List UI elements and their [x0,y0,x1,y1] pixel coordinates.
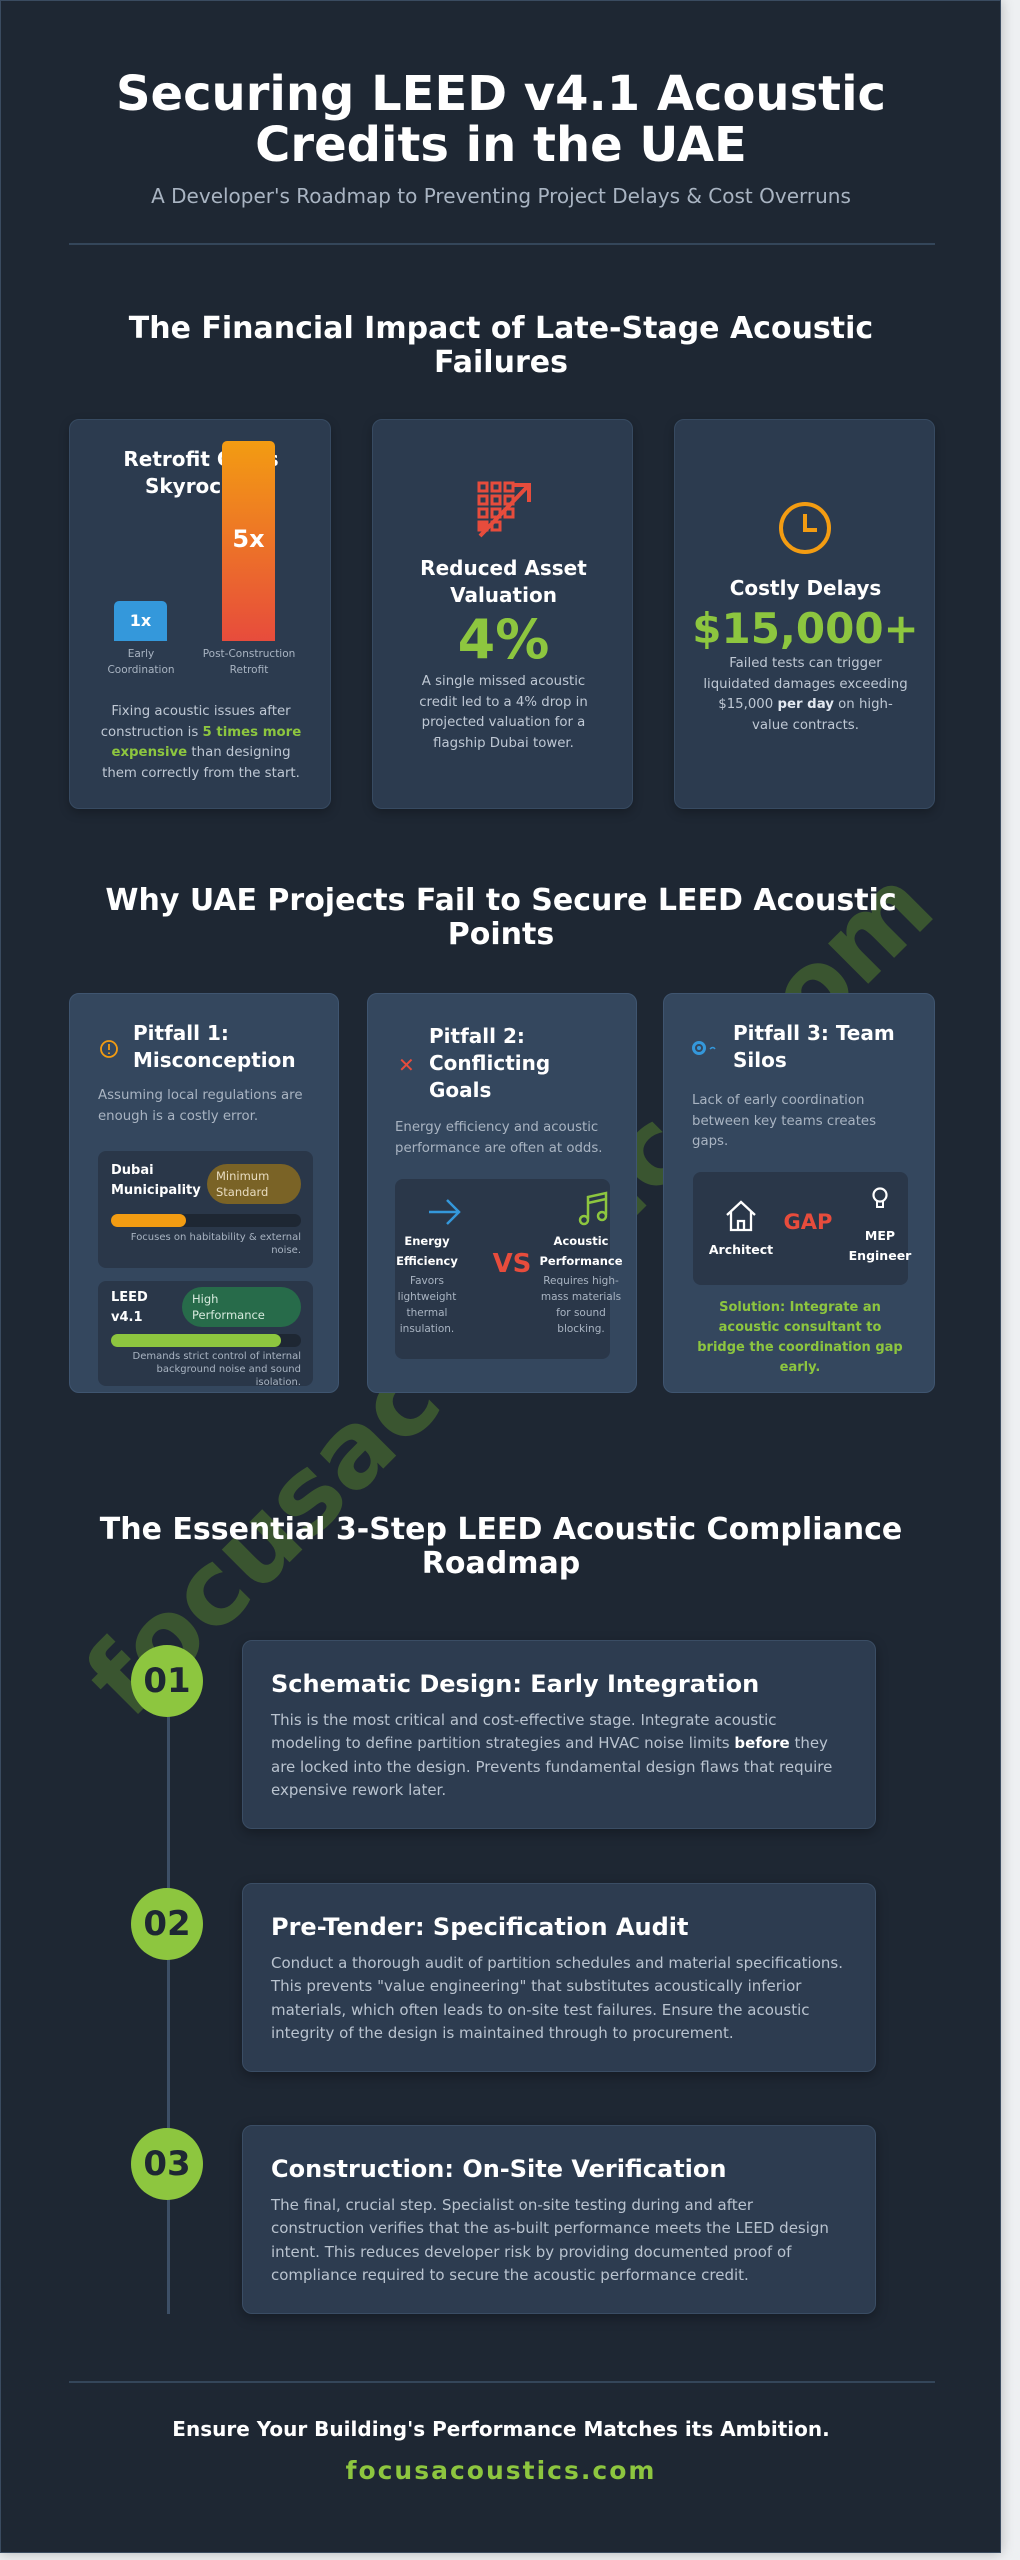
versus box: VS [493,1249,531,1279]
step number 03: 03 [143,2144,191,2184]
step 03 [131,2125,876,2318]
panel: costly delays [674,419,935,809]
heading: why projects fail: Why UAE Projects Fail to Secure LEED Acoustic [105,883,897,918]
panel: pitfall 1 [69,993,339,1393]
heading: why projects fail: Points [448,917,554,952]
pitfall title: Conflicting [429,1051,550,1075]
step number 03 [131,2128,203,2200]
bar: 5x [222,441,275,641]
heading: roadmap: The Essential 3-Step LEED Acoustic Compliance [100,1512,902,1547]
bar chart: Post-Construction [203,648,295,660]
comparison: leed v4.1: High [192,1292,218,1306]
comparison: leed v4.1: LEED [111,1290,148,1305]
footer tagline: Ensure Your Building's Performance Matches its Ambition. [172,2417,830,2441]
text: Failed tests can trigger liquidated damages exceeding $15,000 per day on high-value contracts. [703,656,908,732]
pitfall title: Goals [429,1078,491,1102]
icon: bulb [872,1187,888,1208]
panel: pitfall 3 [663,993,935,1393]
text: Lack of early coordination between key teams creates gaps. [692,1093,876,1149]
comparison: leed v4.1: v4.1 [111,1310,143,1325]
heading: roadmap [100,1512,902,1581]
icon: music note [578,1192,608,1226]
step card 1 [242,1640,876,1829]
versus box [395,1179,610,1359]
comparison: dubai municipality: Minimum Standard [216,1169,269,1199]
icon: warning [100,1040,118,1058]
gap diagram: GAP [784,1210,832,1234]
versus box: Energy Efficiency [396,1234,458,1268]
gap diagram: Engineer [849,1248,911,1263]
bar labels: Early [128,648,154,660]
gap diagram [693,1172,908,1285]
text: Energy efficiency and acoustic performance are often at odds. [395,1120,603,1156]
bar labels: Coordination [107,664,175,676]
panel: retrofit costs [69,419,331,809]
icon: clock [779,502,831,554]
comparison: dubai municipality [98,1151,313,1268]
step card 2: Conduct a thorough audit of partition schedules and material specifications. This prevents "value engineering" that substitutes acoustically inferior materials, which often leads to on-site test failures. Ensure the acoustic integrity of the design is maintained through to procurement. [271,1954,843,2042]
text: A single missed acoustic credit led to a 4% drop in projected valuation for a flagship Dubai tower. [419,674,588,750]
heading: roadmap: Roadmap [422,1546,580,1581]
comparison: leed v4.1: Demands strict control of internal background noise and sound isolation. [133,1351,301,1388]
heading: financial impact [128,311,873,380]
step card 2 [242,1883,876,2072]
versus box: Favors lightweight thermal insulation. [398,1275,456,1335]
bar: 1x [114,601,167,641]
step 01 [131,1640,876,1832]
card title [123,447,279,498]
icon: house [726,1200,756,1232]
versus box: Requires high-mass materials for sound blocking. [541,1275,621,1335]
heading: financial impact: The Financial Impact of Late-Stage Acoustic [129,311,873,346]
text: Fixing acoustic issues after construction is 5 times more expensive than designing them correctly from the start. [101,704,301,780]
watermark: focusacoustics.com [62,845,956,1739]
pitfall title: Pitfall 1: [133,1021,229,1045]
icon: team [692,1041,716,1055]
footer url: focusacoustics.com [346,2456,656,2485]
heading: why projects fail [105,883,897,952]
step card 3: The final, crucial step. Specialist on-site testing during and after construction verifies that the as-built performance meets the LEED design intent. This reduces developer risk by providing documented proof of compliance required to secure the acoustic performance credit. [271,2196,829,2284]
icon: arrow [429,1199,461,1225]
step number 01: 01 [143,1661,191,1701]
step card 3: Construction: On-Site Verification [271,2155,726,2183]
bar: 1x: 1x [130,611,151,630]
icon: valuation grid [478,482,531,538]
panel: pitfall 2 [367,993,637,1393]
title: Securing LEED v4.1 Acoustic [116,66,886,122]
step 02 [131,1883,876,2076]
stat: 4%: 4% [458,608,549,671]
card title: Reduced Asset [420,556,587,580]
bar chart [107,441,295,676]
subtitle: A Developer's Roadmap to Preventing Project Delays & Cost Overruns [151,184,851,208]
bar chart: Retrofit [230,664,268,676]
pitfall title: Pitfall 2: [429,1024,525,1048]
step card 1: This is the most critical and cost-effective stage. Integrate acoustic modeling to define partition strategies and HVAC noise limits before they are locked into the design. Prevents fundamental design flaws that require expensive rework later. [271,1711,832,1799]
timeline line [167,1691,170,2314]
text: Assuming local regulations are enough is a costly error. [98,1088,303,1124]
panel: asset valuation [372,419,633,809]
pitfall title: Misconception [133,1048,296,1072]
card title: Costly Delays [730,576,881,600]
comparison: dubai municipality: Dubai [111,1163,154,1178]
icon: x: ✕ [398,1053,415,1077]
title [116,66,886,173]
step card 1: Schematic Design: Early Integration [271,1670,759,1698]
bar: 5x: 5x [232,525,265,553]
gap diagram: Architect [709,1242,773,1257]
pitfall title [429,1024,550,1102]
step card 3 [242,2125,876,2314]
pitfall title: Pitfall 3: Team [733,1021,895,1045]
comparison: dubai municipality: Municipality [111,1183,201,1198]
versus box: Acoustic Performance [539,1234,623,1268]
stat: $15,000+: $15,000+ [692,604,919,653]
step card 2: Pre-Tender: Specification Audit [271,1913,689,1941]
step number 02: 02 [143,1904,191,1944]
gap diagram: MEP [865,1228,895,1243]
card title: Retrofit Costs [123,447,279,471]
solution text: Solution: Integrate an acoustic consultant to bridge the coordination gap early. [697,1300,903,1375]
step number 01 [131,1645,203,1717]
heading: financial impact: Failures [434,345,568,380]
comparison: dubai municipality: Focuses on habitability & external noise. [131,1232,301,1256]
card title: Valuation [450,583,557,607]
title: Credits in the UAE [255,117,747,173]
step number 02 [131,1888,203,1960]
pitfall title [133,1021,296,1072]
card title [420,556,587,607]
pitfall title [733,1021,895,1072]
comparison: leed v4.1: Performance [192,1308,265,1322]
card title: Skyrocket [145,474,257,498]
bar labels [107,648,175,676]
comparison: leed v4.1 [98,1281,313,1386]
pitfall title: Silos [733,1048,787,1072]
